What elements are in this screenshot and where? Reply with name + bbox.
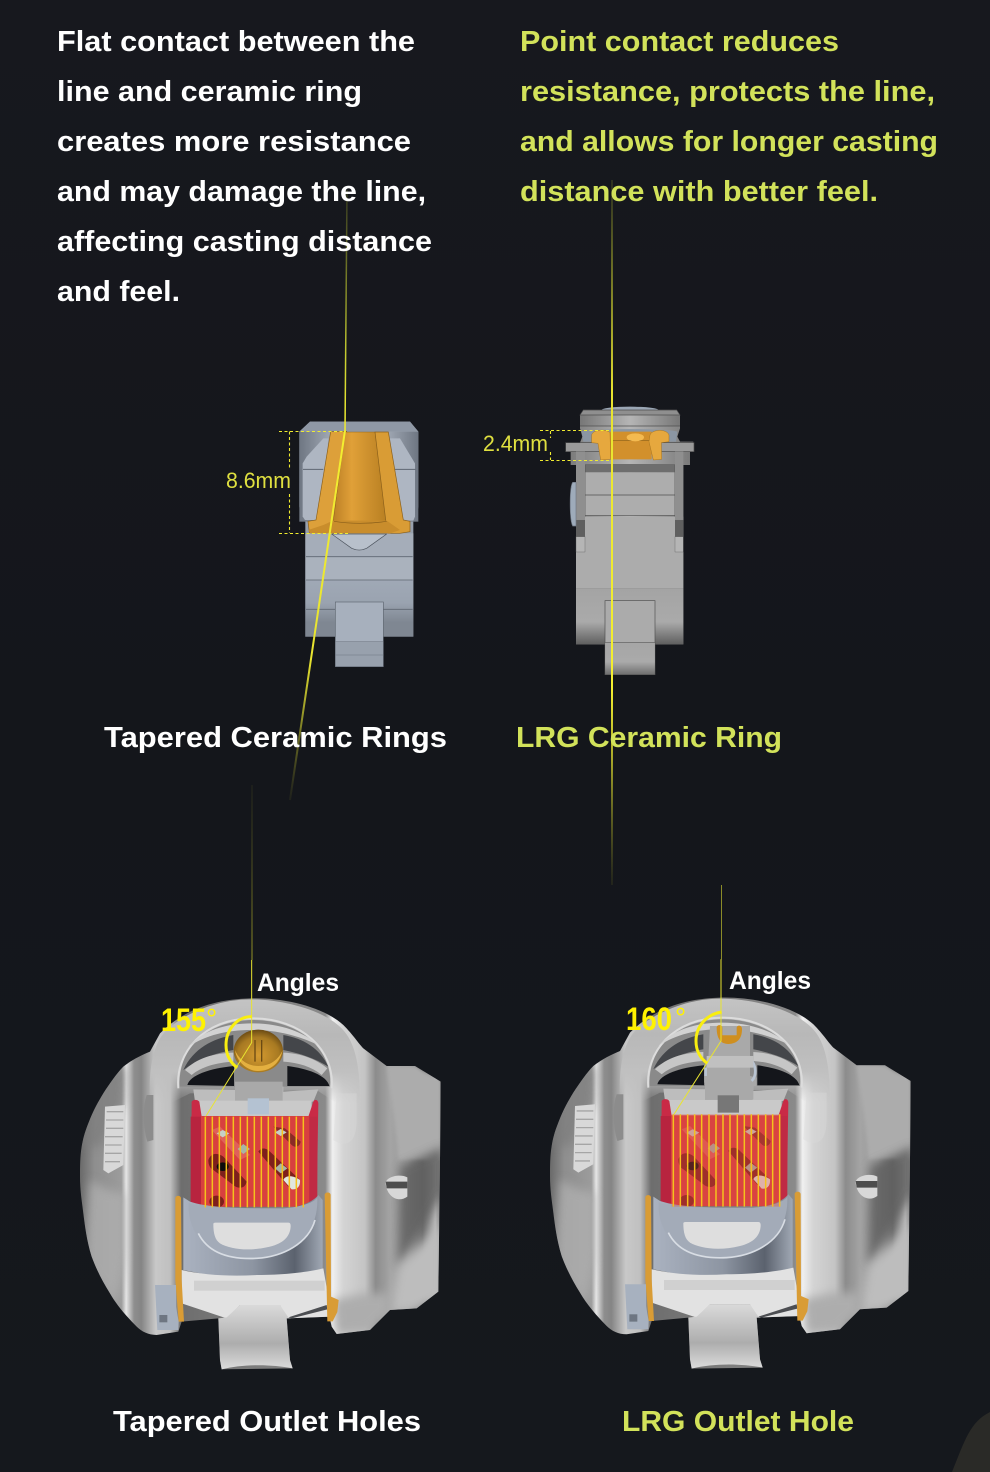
text block: flat contact: affecting casting distance bbox=[57, 226, 432, 258]
reel body bbox=[540, 993, 920, 1373]
text block: flat contact: creates more resistance bbox=[57, 126, 411, 158]
text block: flat contact: line and ceramic ring bbox=[57, 76, 362, 108]
tapered gold ring bbox=[308, 431, 410, 533]
tapered ring housing bbox=[299, 422, 418, 667]
fishing line: LRG outlet top bbox=[720, 885, 722, 960]
ceramic ring panel: LRG bbox=[483, 407, 694, 675]
caption: LRG outlet hole: LRG Outlet Hole bbox=[622, 1406, 854, 1438]
text block: flat contact: and may damage the line, bbox=[57, 176, 426, 208]
LRG ring housing bbox=[566, 407, 694, 675]
fishing line: tapered ring lower bbox=[290, 430, 345, 800]
caption: tapered ceramic rings: Tapered Ceramic Rings bbox=[104, 722, 447, 754]
text block: point contact: resistance, protects the line, bbox=[520, 76, 935, 108]
corner shadow shape bbox=[952, 1412, 990, 1472]
dimension 8.6mm bbox=[226, 432, 349, 534]
dimension 2.4mm: 2.4mm bbox=[483, 431, 548, 456]
caption: tapered outlet holes: Tapered Outlet Holes bbox=[113, 1406, 421, 1438]
text block: point contact: and allows for longer casting bbox=[520, 126, 938, 158]
angles label: Angles bbox=[729, 967, 811, 995]
caption: LRG ceramic ring: LRG Ceramic Ring bbox=[516, 722, 782, 754]
angle 155: ° bbox=[206, 1003, 217, 1034]
text block: point contact bbox=[520, 26, 938, 208]
text block: flat contact bbox=[57, 26, 432, 308]
dimension 2.4mm bbox=[483, 430, 612, 460]
fishing line: tapered outlet top bbox=[251, 785, 253, 960]
angle 160: 160 bbox=[626, 1001, 672, 1037]
text block: point contact: distance with better feel. bbox=[520, 176, 878, 208]
angles label: Angles bbox=[257, 969, 339, 997]
angle 160: ° bbox=[675, 1002, 686, 1033]
reel body bbox=[70, 993, 450, 1373]
fishing line: LRG ring bbox=[611, 180, 613, 885]
LRG line guide and angle bbox=[672, 959, 780, 1207]
ceramic ring panel: tapered bbox=[226, 422, 418, 667]
text block: flat contact: Flat contact between the bbox=[57, 26, 415, 58]
LRG gold ring bbox=[592, 430, 669, 460]
angle 155: 155 bbox=[161, 1002, 206, 1038]
fishing line: tapered ring bbox=[345, 190, 347, 432]
text block: point contact: Point contact reduces bbox=[520, 26, 839, 58]
reel: LRG outlet bbox=[540, 959, 920, 1373]
reel: tapered outlet bbox=[70, 960, 450, 1373]
spool lines and angle bbox=[205, 960, 303, 1207]
dimension 8.6mm: 8.6mm bbox=[226, 468, 291, 493]
text block: flat contact: and feel. bbox=[57, 276, 180, 308]
